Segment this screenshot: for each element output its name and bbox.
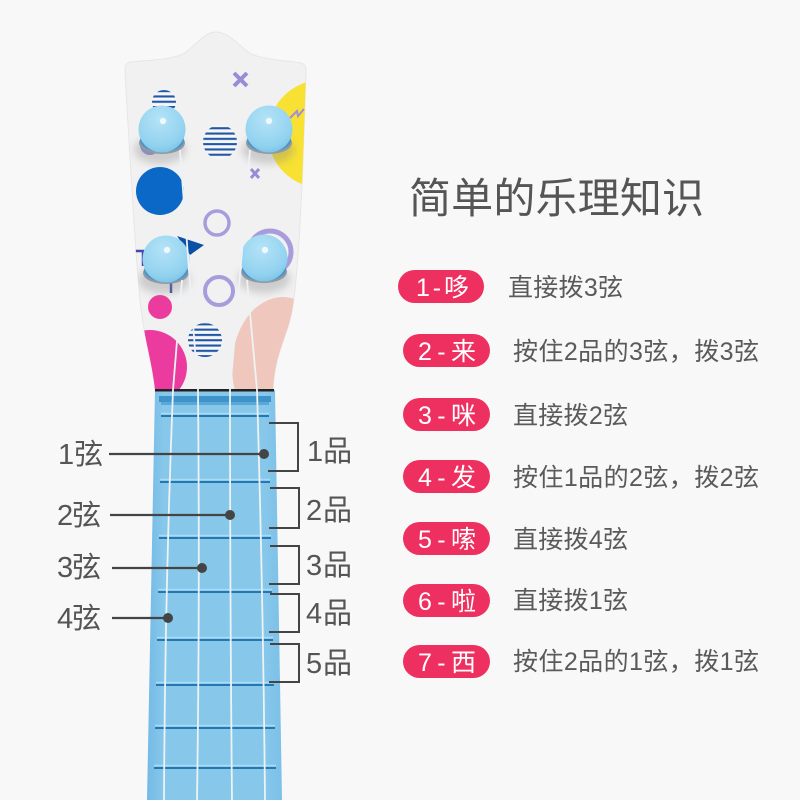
note row 5 — [403, 522, 628, 555]
fret labels: 5品 — [306, 648, 352, 680]
note row 7: 7-西 — [418, 649, 476, 677]
note row 6: 6-啦 — [418, 588, 476, 616]
string callouts — [57, 438, 269, 635]
note row 7: 按住2品的1弦，拨1弦 — [513, 648, 759, 676]
note row 2 — [403, 334, 759, 367]
fret labels: 4品 — [306, 598, 352, 630]
string callouts: 3弦 — [57, 551, 101, 584]
title: 简单的乐理知识 — [409, 175, 704, 222]
note row 2: 按住2品的3弦，拨3弦 — [513, 338, 759, 366]
note row 4: 按住1品的2弦，拨2弦 — [513, 464, 759, 492]
strings — [164, 150, 265, 800]
fret brackets — [268, 423, 299, 682]
note row 6: 直接拨1弦 — [513, 587, 628, 615]
fret labels: 3品 — [306, 550, 352, 582]
note row 3: 直接拨2弦 — [513, 402, 628, 430]
headstock decorations — [132, 72, 306, 390]
frets — [154, 414, 276, 766]
tuning peg top right — [246, 106, 292, 154]
fret labels: 1品 — [307, 436, 352, 468]
note row 5: 直接拨4弦 — [513, 526, 628, 554]
note row 7 — [403, 645, 759, 678]
note row 1: 1-哆 — [416, 274, 469, 302]
note row 2: 2-来 — [418, 338, 476, 366]
string callouts: 1弦 — [58, 438, 103, 471]
note row 4 — [403, 460, 759, 493]
tuning peg bottom left — [142, 236, 190, 284]
note row 4: 4-发 — [418, 464, 476, 492]
fret labels: 2品 — [306, 495, 352, 527]
note row 6 — [403, 584, 628, 617]
ukulele headstock — [124, 32, 306, 390]
note row 1 — [398, 270, 623, 303]
tuning peg top left — [138, 106, 186, 154]
note row 3 — [403, 398, 628, 431]
fret labels — [306, 436, 352, 680]
tuning peg bottom right — [240, 234, 288, 283]
note row 3: 3-咪 — [418, 402, 476, 430]
note row 1: 直接拨3弦 — [508, 274, 623, 302]
string callouts: 4弦 — [57, 602, 101, 635]
note row 5: 5-嗦 — [418, 526, 476, 554]
string callouts: 2弦 — [57, 499, 101, 532]
fretboard neck — [147, 389, 282, 800]
